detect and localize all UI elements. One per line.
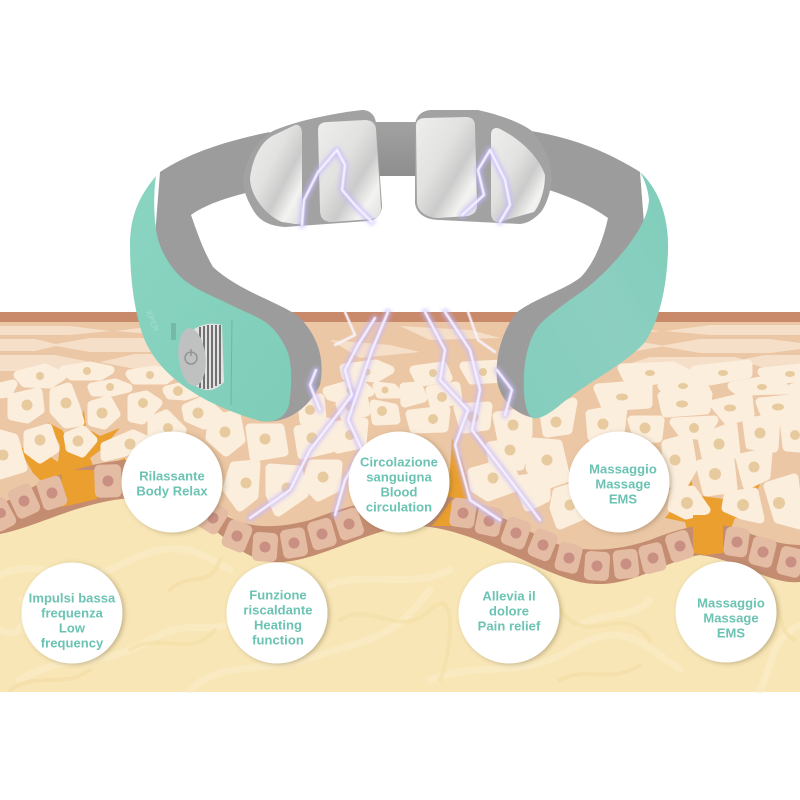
callout: Impulsi [22, 562, 122, 664]
callout: Allevia: Allevia il [482, 588, 536, 604]
callout: Impulsi: Low [59, 620, 86, 636]
callout: Rilassante: Rilassante [139, 468, 205, 484]
control panel [144, 309, 232, 405]
callout: Massaggio upper [568, 432, 670, 532]
epidermis background [0, 322, 800, 568]
callout: Circolazione: circulation [366, 500, 432, 514]
callout: Funzione: function [252, 632, 304, 648]
callout: Massaggio lower: Massaggio [697, 596, 765, 610]
callout: Circolazione: Circolazione [360, 454, 438, 470]
power icon [185, 349, 197, 364]
callout: Massaggio lower: Massage [703, 610, 759, 626]
callout: Rilassante: Body Relax [136, 484, 208, 498]
callout: Massaggio upper: Massage [595, 476, 651, 492]
callout: Circolazione: Blood [380, 484, 418, 500]
cell nuclei [0, 367, 800, 511]
callout: Funzione [226, 562, 328, 664]
centre bridge [372, 122, 420, 176]
orange interstitial regions [18, 410, 765, 553]
callout: Funzione: riscaldante [243, 602, 313, 618]
callout: Allevia [458, 562, 560, 664]
callout: Massaggio lower: EMS [717, 626, 745, 640]
callout: Impulsi: frequency [41, 636, 104, 650]
dial face [176, 327, 208, 387]
basal layer band [0, 460, 800, 584]
callout: Massaggio upper: Massaggio [589, 462, 657, 476]
callout: Impulsi: frequenza [41, 606, 104, 620]
left head pad housing [243, 110, 382, 227]
left arm grey inner band [150, 132, 322, 422]
basal cell nuclei [0, 476, 796, 572]
right head pad housing [415, 110, 552, 224]
callout: Allevia: Pain relief [478, 618, 541, 634]
surface band [0, 312, 800, 322]
callout: Funzione: Heating [254, 618, 302, 632]
callout: Circolazione: sanguigna [366, 470, 432, 484]
metal electrode pads [250, 117, 545, 224]
lightning glow [250, 150, 540, 520]
neck massager device [130, 110, 668, 422]
callout: Circolazione [348, 432, 450, 532]
epidermal cells [0, 364, 800, 525]
callout: Impulsi: Impulsi bassa [29, 590, 116, 606]
lightning core [250, 150, 540, 520]
callout: Funzione: Funzione [249, 588, 307, 602]
electric lightning effects [250, 150, 540, 520]
brand mark: XPER [144, 309, 161, 333]
right arm grey inner band [497, 130, 650, 418]
fat layer [0, 480, 800, 692]
callout: Rilassante [122, 432, 222, 532]
callout: Massaggio upper: EMS [609, 492, 637, 506]
callout: Massaggio lower [676, 562, 776, 662]
skin cross-section illustration [0, 312, 800, 692]
basal cells [0, 466, 800, 580]
stratum corneum flakes [0, 325, 800, 371]
left arm teal shell [130, 176, 291, 421]
right arm teal shell [524, 172, 668, 418]
knurled dial [190, 324, 224, 390]
orange columns crossing the basal layer [62, 470, 723, 555]
callout: Allevia: dolore [489, 604, 529, 618]
